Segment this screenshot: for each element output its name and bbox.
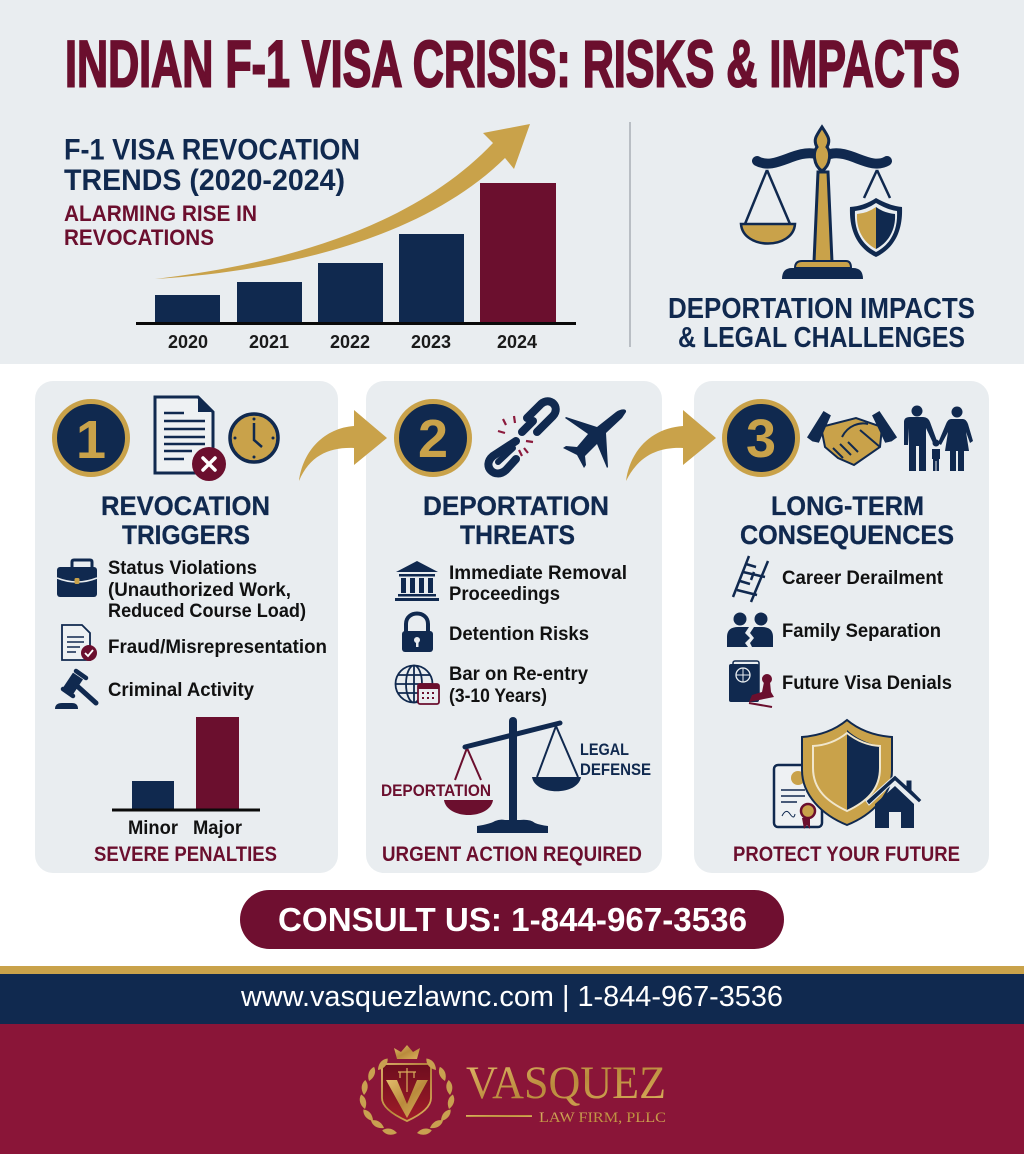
- panel heading: DEPORTATION: [423, 491, 609, 521]
- heading: revocation trends: F-1 VISA REVOCATION: [64, 134, 360, 166]
- heading: revocation trends: TRENDS (2020-2024): [64, 164, 345, 197]
- panel: deportation threats: [366, 381, 662, 873]
- list text: status violations: [108, 558, 306, 622]
- heading: revocation trends: [64, 134, 360, 197]
- icon: briefcase: [57, 560, 97, 597]
- list text: career: Career Derailment: [782, 568, 944, 589]
- logo wordmark: LAW FIRM, PLLC: [539, 1110, 666, 1126]
- icon: padlock: [402, 614, 433, 652]
- header band: [0, 0, 1024, 364]
- logo crest: [358, 1045, 456, 1136]
- icon: broken chain: [488, 401, 556, 473]
- bar chart: revocation trends: 2023: [411, 332, 451, 352]
- bar chart: revocation trends: 2021: [249, 332, 289, 352]
- icon: courthouse: [395, 561, 439, 601]
- list text: removal: Immediate Removal: [449, 563, 627, 584]
- bar chart: penalties: Major: [193, 818, 243, 839]
- caption: severe penalties: SEVERE PENALTIES: [94, 843, 277, 866]
- bar chart: penalties: [112, 717, 260, 839]
- panel heading: THREATS: [460, 520, 575, 550]
- bar chart: revocation trends: [136, 183, 576, 352]
- call to action button: CONSULT US: 1-844-967-3536: [278, 901, 747, 938]
- label: legal defense: DEFENSE: [580, 760, 651, 779]
- list text: removal: [449, 563, 627, 605]
- list text: status violations: (Unauthorized Work,: [108, 580, 291, 601]
- icon: gavel: [55, 667, 96, 709]
- step number 2: [396, 402, 470, 474]
- subheading: alarming rise: REVOCATIONS: [64, 225, 214, 250]
- icon: clock: [230, 414, 278, 462]
- logo: Vasquez Law Firm: [358, 1045, 666, 1136]
- call to action button: [240, 890, 784, 949]
- heading: deportation impacts: DEPORTATION IMPACTS: [668, 293, 975, 325]
- list text: removal: Proceedings: [449, 584, 560, 605]
- arrow: step 1 to 2: [299, 410, 387, 481]
- icon: passport and stamp: [729, 661, 774, 707]
- heading: deportation impacts: & LEGAL CHALLENGES: [678, 322, 965, 354]
- icon: scales with shield: [741, 127, 902, 279]
- icon: tilted scales: [444, 717, 581, 833]
- icon: separated family: [727, 612, 773, 647]
- label: deportation: DEPORTATION: [381, 781, 491, 800]
- list text: detention: Detention Risks: [449, 624, 589, 645]
- panel heading: [423, 491, 609, 550]
- heading: deportation impacts: [668, 293, 975, 354]
- contact bar: www.vasquezlawnc.com | 1-844-967-3536: [240, 981, 783, 1013]
- list text: fraud: Fraud/Misrepresentation: [108, 637, 327, 658]
- panel heading: CONSEQUENCES: [740, 520, 954, 550]
- list text: family: Family Separation: [782, 621, 941, 642]
- step number 3: 3: [746, 409, 776, 469]
- list text: re-entry bar: [449, 664, 588, 707]
- panel: revocation triggers: [35, 381, 338, 873]
- step number 2: 2: [418, 409, 448, 469]
- step number 3: [724, 402, 798, 474]
- icon: broken ladder: [733, 556, 768, 602]
- list text: status violations: Status Violations: [108, 558, 257, 579]
- arrow: rising trend: [155, 124, 530, 279]
- icon: checked document: [62, 625, 97, 661]
- caption: urgent action: URGENT ACTION REQUIRED: [382, 843, 642, 866]
- bar chart: revocation trends: 2020: [168, 332, 208, 352]
- icon: shield, certificate and house: [774, 720, 922, 829]
- panel: long-term consequences: [694, 381, 989, 873]
- bar chart: revocation trends: 2024: [497, 332, 537, 352]
- footer band: [0, 1024, 1024, 1154]
- icon: airplane: [563, 409, 626, 468]
- arrow: step 2 to 3: [626, 410, 716, 481]
- list text: criminal activity: Criminal Activity: [108, 680, 254, 701]
- icon: rejected document: [155, 397, 226, 481]
- list text: visa denials: Future Visa Denials: [782, 673, 952, 694]
- panel heading: REVOCATION: [101, 491, 270, 521]
- contact bar: [0, 966, 1024, 1024]
- panel heading: [101, 491, 270, 550]
- panel heading: LONG-TERM: [771, 491, 924, 521]
- list text: status violations: Reduced Course Load): [108, 601, 306, 622]
- list text: re-entry bar: (3-10 Years): [449, 686, 547, 707]
- icon: handshake: [809, 413, 895, 465]
- logo wordmark: VASQUEZ: [466, 1057, 666, 1109]
- bar chart: revocation trends: 2022: [330, 332, 370, 352]
- panel heading: [740, 491, 954, 550]
- step number 1: 1: [76, 410, 106, 470]
- bar chart: penalties: Minor: [128, 818, 179, 839]
- step number 1: [54, 402, 128, 474]
- subheading: alarming rise: ALARMING RISE IN: [64, 201, 257, 226]
- label: legal defense: [580, 740, 651, 779]
- caption: protect your future: PROTECT YOUR FUTURE: [733, 843, 960, 866]
- icon: family: [904, 406, 973, 471]
- panel heading: TRIGGERS: [122, 520, 250, 550]
- list text: re-entry bar: Bar on Re-entry: [449, 664, 588, 685]
- subheading: alarming rise: [64, 201, 257, 250]
- icon: globe and calendar: [396, 665, 439, 704]
- label: legal defense: LEGAL: [580, 740, 629, 759]
